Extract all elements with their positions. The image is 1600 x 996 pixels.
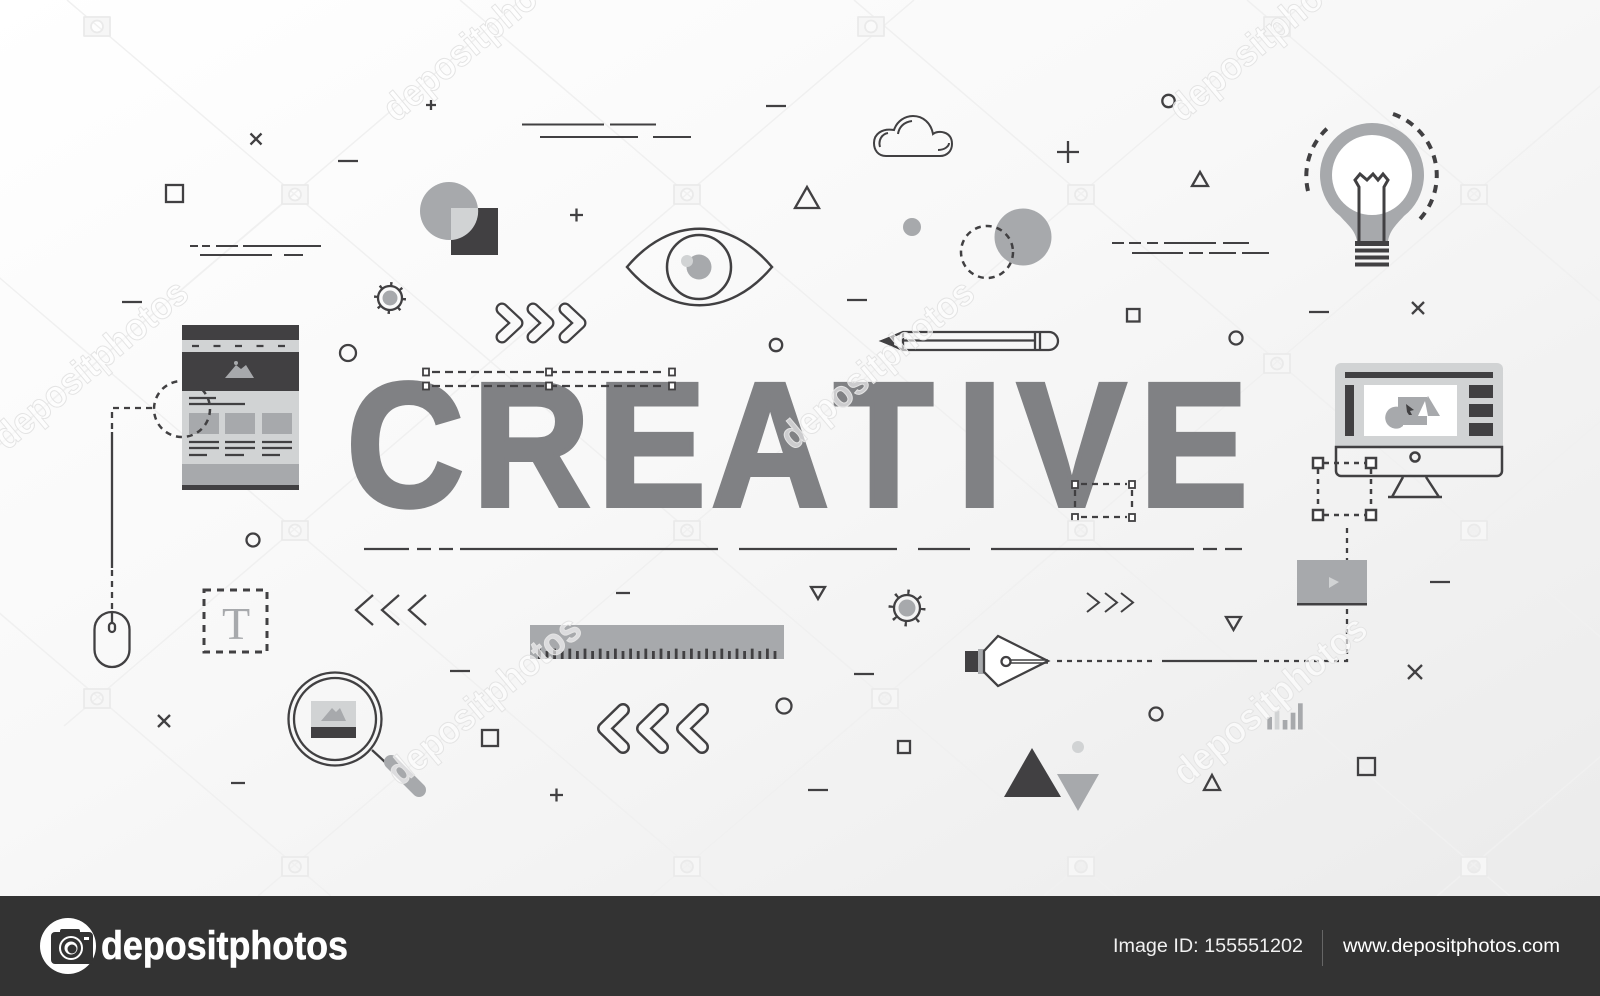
icon: double chevrons right [502,309,580,337]
watermark: brand text: depositphotos [379,608,590,794]
icon: overlapping circle and square [420,182,498,255]
icon: text box: T [222,598,250,649]
watermark: cameras [84,17,1487,876]
icon: lightbulb [1306,114,1437,266]
icon: selection handles [1313,458,1376,520]
logo: camera badge [40,918,96,974]
small outlined squares [166,185,1375,775]
icon: gear left [376,284,404,312]
icon: bold chevrons left [604,710,702,747]
icon: thin chevrons right [1087,593,1133,612]
icon: pencil [882,332,1058,350]
watermark: brand text [0,0,1376,794]
icon: eye [627,229,772,305]
icon: desktop monitor [1335,363,1503,497]
connector and mouse icon [94,408,152,667]
icon: website layout [154,325,299,490]
icon: small bar chart [1267,703,1303,730]
icon: ruler [530,625,784,659]
icon: pen nib with connector [965,608,1347,686]
icon: magnifier [288,672,419,790]
icon: gear centre [891,592,923,624]
watermark: brand text: depositphotos [772,272,983,458]
website url: www.depositphotos.com [1342,936,1560,957]
selection frame over word [423,368,1135,521]
icon: triangles and dot [1004,741,1099,811]
small outlined triangles [795,172,1241,790]
underline below word [364,548,1242,550]
small outlined circles [246,95,1242,721]
decorative line groups [190,124,1269,255]
image id: Image ID: 155551202 [1113,936,1303,957]
icon: cloud [874,116,952,156]
logo: wordmark: depositphotos [101,924,348,968]
footer divider [1322,930,1323,966]
icon: thin chevrons left [356,595,426,625]
footer bar [0,896,1600,996]
word: CREATIVE: CREATIVE [347,346,1248,543]
small dashes [122,106,1450,790]
icon: dashed circle with grey circle [961,208,1052,278]
icon: text box [204,590,267,652]
grey dot [903,218,921,236]
watermark: brand text: depositphotos [1165,608,1376,794]
small plus and cross marks [158,100,1424,802]
icon: video player [1297,528,1367,606]
